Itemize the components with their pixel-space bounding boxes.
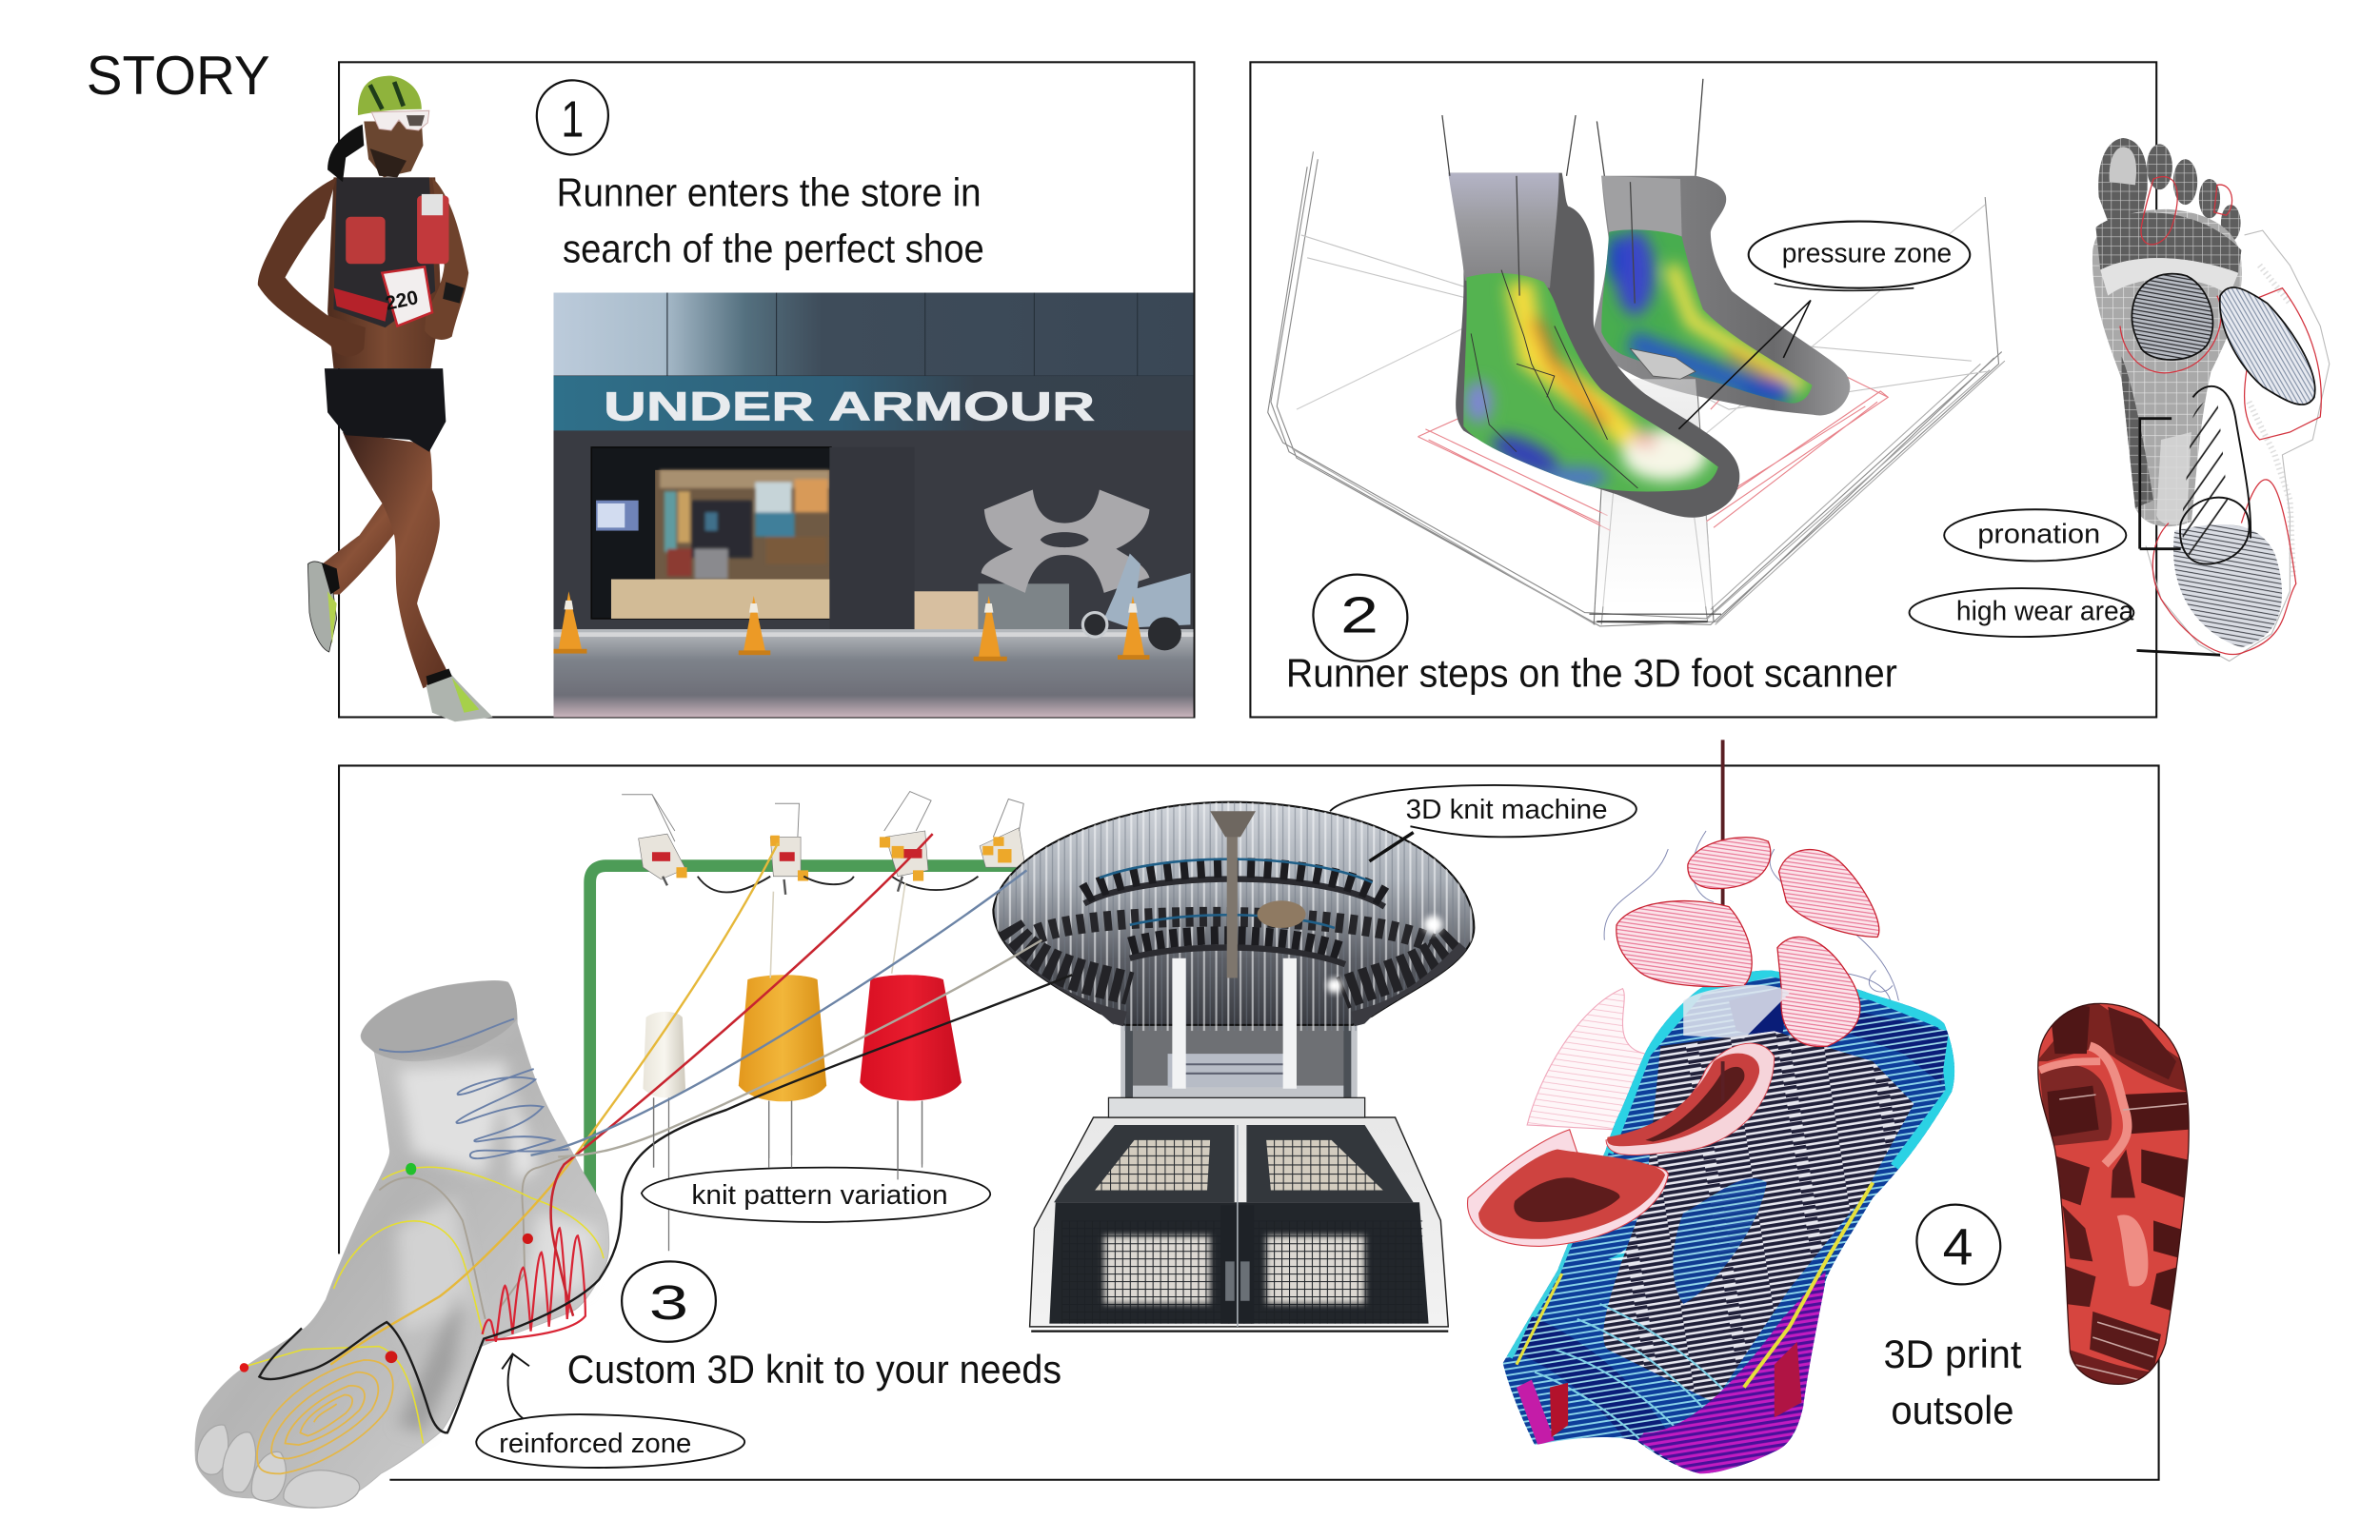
blue knit lines	[379, 1018, 568, 1158]
panel: step 1 frame	[339, 62, 1194, 717]
illustration: runner	[258, 76, 493, 721]
dome	[993, 802, 1474, 1025]
callout: pressure zone	[1678, 222, 1970, 429]
step 3 caption: Custom 3D knit to your needs	[567, 1348, 1061, 1392]
front leg	[343, 432, 449, 688]
scanner wireframe	[1268, 151, 2005, 626]
step 4 caption: outsole	[1891, 1389, 2013, 1432]
vertical link line	[1721, 740, 1724, 1071]
arrow to reinforced zone	[502, 1354, 529, 1421]
step 1 number	[537, 80, 608, 154]
step 1 caption	[557, 171, 984, 271]
front shoe	[426, 672, 493, 721]
sketched outer outline	[2146, 230, 2330, 661]
illustration: 3D foot last	[195, 981, 609, 1508]
red arch shape	[1606, 1043, 1775, 1155]
store logo	[982, 490, 1149, 593]
illustration: 3D foot scanner	[1268, 79, 2005, 626]
yellow outline lines	[241, 1167, 604, 1444]
step 4 caption	[1883, 1333, 2022, 1432]
lateral pressure oval	[2220, 287, 2315, 405]
back foot scan	[1594, 176, 1850, 415]
callout: 3D knit machine	[1330, 785, 1636, 861]
left arm	[258, 177, 366, 357]
step 1 number: 1	[561, 90, 584, 148]
store doorway	[591, 447, 831, 619]
step 1 caption: search of the perfect shoe	[563, 227, 984, 271]
light and shadow on the last	[397, 1061, 599, 1432]
faint sketch outlines	[1604, 831, 1898, 1023]
hatched heel	[2173, 524, 2282, 647]
step 3 number	[622, 1261, 716, 1342]
red heel shape	[1468, 1130, 1668, 1246]
back shoe	[307, 562, 337, 652]
illustration: 3D print toolpath foot	[1468, 831, 1964, 1493]
navy patches upper right	[1849, 1013, 1948, 1084]
magenta lower edge	[1637, 1271, 1826, 1478]
callout: 3D knit machine: 3D knit machine	[1406, 795, 1608, 825]
illustration: orange yarn cone	[739, 975, 826, 1158]
toes	[2098, 138, 2148, 222]
callout: reinforced zone	[476, 1414, 744, 1468]
gray knit lines	[379, 1156, 568, 1319]
red floor plate	[1418, 341, 1888, 531]
torso	[327, 177, 442, 368]
illustration: yarn feeders	[622, 792, 1025, 895]
ball of foot oval	[2132, 274, 2212, 360]
hair	[327, 125, 364, 182]
step 4 caption: 3D print	[1883, 1333, 2022, 1376]
ankle top cut	[361, 981, 517, 1061]
step 4 number	[1916, 1205, 2000, 1284]
panel: step 3 and 4 frame	[339, 765, 2159, 1480]
illustration: white yarn cone	[643, 1012, 685, 1251]
illustration: red printed outsole	[2036, 997, 2189, 1395]
red contour lines	[2120, 177, 2321, 655]
traffic cones	[553, 591, 1149, 661]
pavement	[553, 629, 1194, 717]
scooter	[1082, 553, 1190, 650]
central translucent leg	[1596, 379, 1714, 606]
front foot scan	[1448, 173, 1739, 518]
illustration: green yarn frame	[590, 866, 1016, 1197]
sunglasses	[371, 110, 429, 130]
step 4 number: 4	[1943, 1219, 1973, 1276]
callout: pronation	[1944, 509, 2126, 561]
panel: step 2 frame	[1250, 62, 2156, 717]
sign lettering: UNDER ARMOUR	[604, 384, 1095, 429]
step 2 number: 2	[1340, 586, 1378, 643]
photo: Under Armour store	[553, 292, 1194, 717]
black bracket	[2140, 419, 2181, 549]
headband	[358, 76, 422, 115]
forefoot to mid sole	[2092, 209, 2242, 526]
toolpath body	[1494, 963, 1964, 1493]
column section	[1121, 1013, 1358, 1104]
upper grille	[1054, 1125, 1235, 1202]
toes	[197, 1425, 360, 1508]
lower cage	[1049, 1202, 1429, 1324]
pink hatched toe blobs	[1688, 838, 1771, 889]
illustration: circular knit machine	[985, 796, 1486, 1332]
title: STORY	[87, 46, 270, 107]
callout: high wear area	[1910, 588, 2133, 637]
illustration: yarn threads	[259, 834, 1072, 1432]
base cabinet	[1030, 1117, 1448, 1327]
step 1 caption: Runner enters the store in	[557, 171, 982, 215]
illustration: red yarn cone	[770, 882, 962, 1175]
step 2 caption: Runner steps on the 3D foot scanner	[1286, 652, 1897, 696]
cyan edge bands	[1608, 971, 1952, 1168]
red zigzag	[483, 1228, 585, 1342]
callout: pressure zone: pressure zone	[1782, 239, 1952, 269]
callout: high wear area: high wear area	[1956, 597, 2133, 627]
lower concentric toolpath bands	[1524, 1334, 1676, 1493]
contour lines on scan	[1471, 270, 1637, 488]
bib number: 220	[384, 286, 420, 315]
shorts	[325, 368, 446, 452]
back leg	[319, 503, 394, 594]
right arm	[425, 177, 468, 340]
step 3 number: 3	[649, 1275, 688, 1330]
head with beard	[364, 121, 423, 177]
inner black-white stripes	[1603, 1031, 1914, 1403]
leg sketch lines	[1442, 79, 1703, 304]
callout: knit pattern variation	[642, 1097, 990, 1222]
callout: pronation: pronation	[1977, 519, 2100, 549]
pink hatched blob far left	[1527, 989, 1645, 1130]
gold spiral patch	[257, 1360, 393, 1473]
callout: knit pattern variation: knit pattern variation	[691, 1180, 948, 1211]
illustration: plantar foot map	[2092, 138, 2330, 661]
callout: reinforced zone: reinforced zone	[499, 1429, 691, 1459]
arch outline with hatch	[2181, 397, 2230, 564]
race vest	[333, 177, 435, 327]
step 2 number	[1313, 575, 1407, 661]
landmark dots	[406, 1163, 416, 1175]
